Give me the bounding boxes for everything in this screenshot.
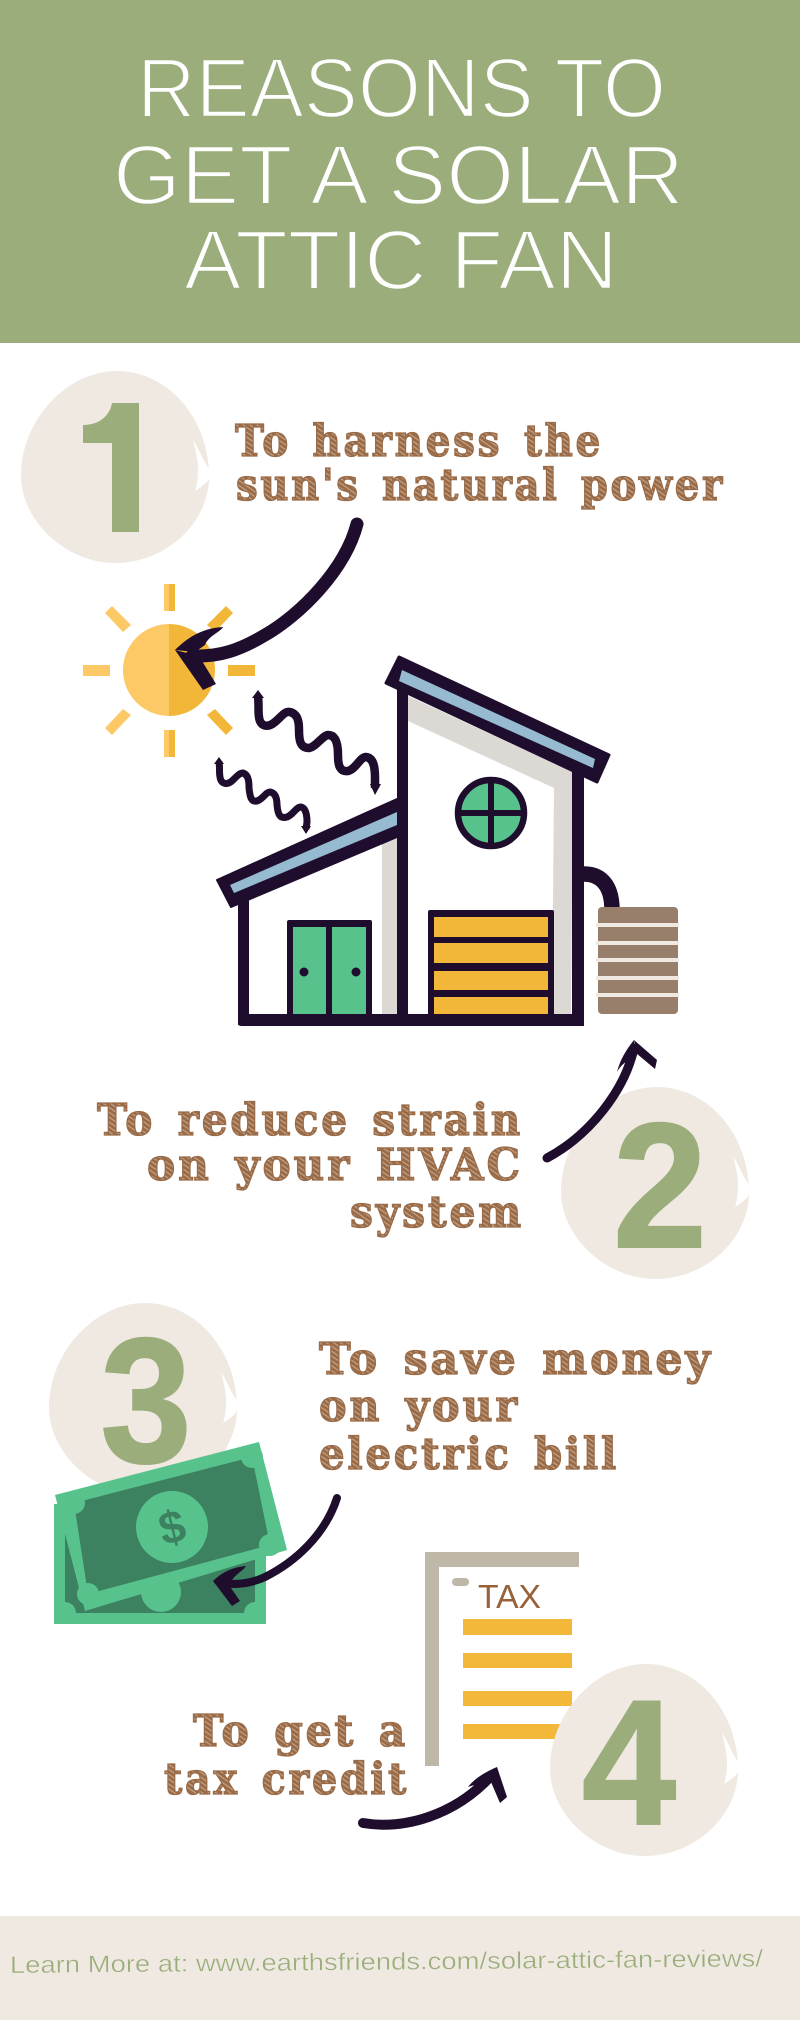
reason 2 text: on your HVAC [147, 1140, 523, 1191]
reason 2 text: system [350, 1187, 524, 1238]
title: ATTIC FAN [184, 213, 618, 307]
heat wave large [252, 690, 381, 795]
reason 3 text [319, 1334, 713, 1480]
garage door [428, 910, 554, 1016]
reason 4 text: To get a [193, 1706, 408, 1757]
reason 3 text: electric bill [319, 1429, 619, 1480]
number badge 3 [49, 1302, 241, 1501]
door [287, 920, 372, 1016]
reason 1 text: sun's natural power [236, 460, 725, 511]
number badge 3: 3 [100, 1302, 192, 1501]
arrow: text 4 to tax document [363, 1767, 507, 1825]
reason 3 text: on your [319, 1381, 520, 1432]
reason 2 text [97, 1095, 524, 1238]
footer band [0, 1916, 800, 2020]
rain barrel [584, 874, 679, 1014]
back bill [54, 1504, 266, 1624]
header banner [0, 0, 800, 343]
number badge 4: 4 [582, 1663, 676, 1862]
arrow: text 3 to money [213, 1498, 337, 1606]
number badge 2 [561, 1086, 753, 1285]
tax document icon: TAX [478, 1578, 541, 1615]
house shadows [382, 696, 573, 1014]
title: GET A SOLAR [113, 128, 684, 222]
number badge 4 [550, 1663, 742, 1862]
round window [458, 780, 524, 846]
lower roof [217, 799, 397, 907]
reason 1 text: To harness the [235, 416, 603, 467]
footer link text: Learn More at: www.earthsfriends.com/solar-attic-fan-reviews/ [10, 1945, 763, 1979]
number badge 2: 2 [613, 1086, 707, 1285]
front bill: $ [153, 1499, 191, 1555]
icon: money bills [54, 1442, 287, 1624]
house walls and base [238, 685, 584, 1026]
arrow: text 1 to sun [175, 524, 357, 690]
arrow: text 2 to barrel [547, 1040, 657, 1158]
reason 3 text: To save money [319, 1334, 713, 1385]
heat wave small [214, 757, 311, 834]
front bill [55, 1442, 287, 1611]
title [113, 41, 684, 307]
number badge 1: 1 [74, 371, 174, 570]
reason 2 text: To reduce strain [97, 1095, 523, 1146]
tax document icon [425, 1552, 579, 1766]
icon: house [217, 657, 609, 1026]
icon: sun [83, 584, 255, 757]
reason 4 text [164, 1706, 409, 1805]
reason 4 text: tax credit [164, 1754, 409, 1805]
number badge 1 [21, 371, 213, 570]
reason 1 text [235, 416, 725, 511]
upper roof [386, 657, 609, 782]
title: REASONS TO [137, 41, 666, 135]
